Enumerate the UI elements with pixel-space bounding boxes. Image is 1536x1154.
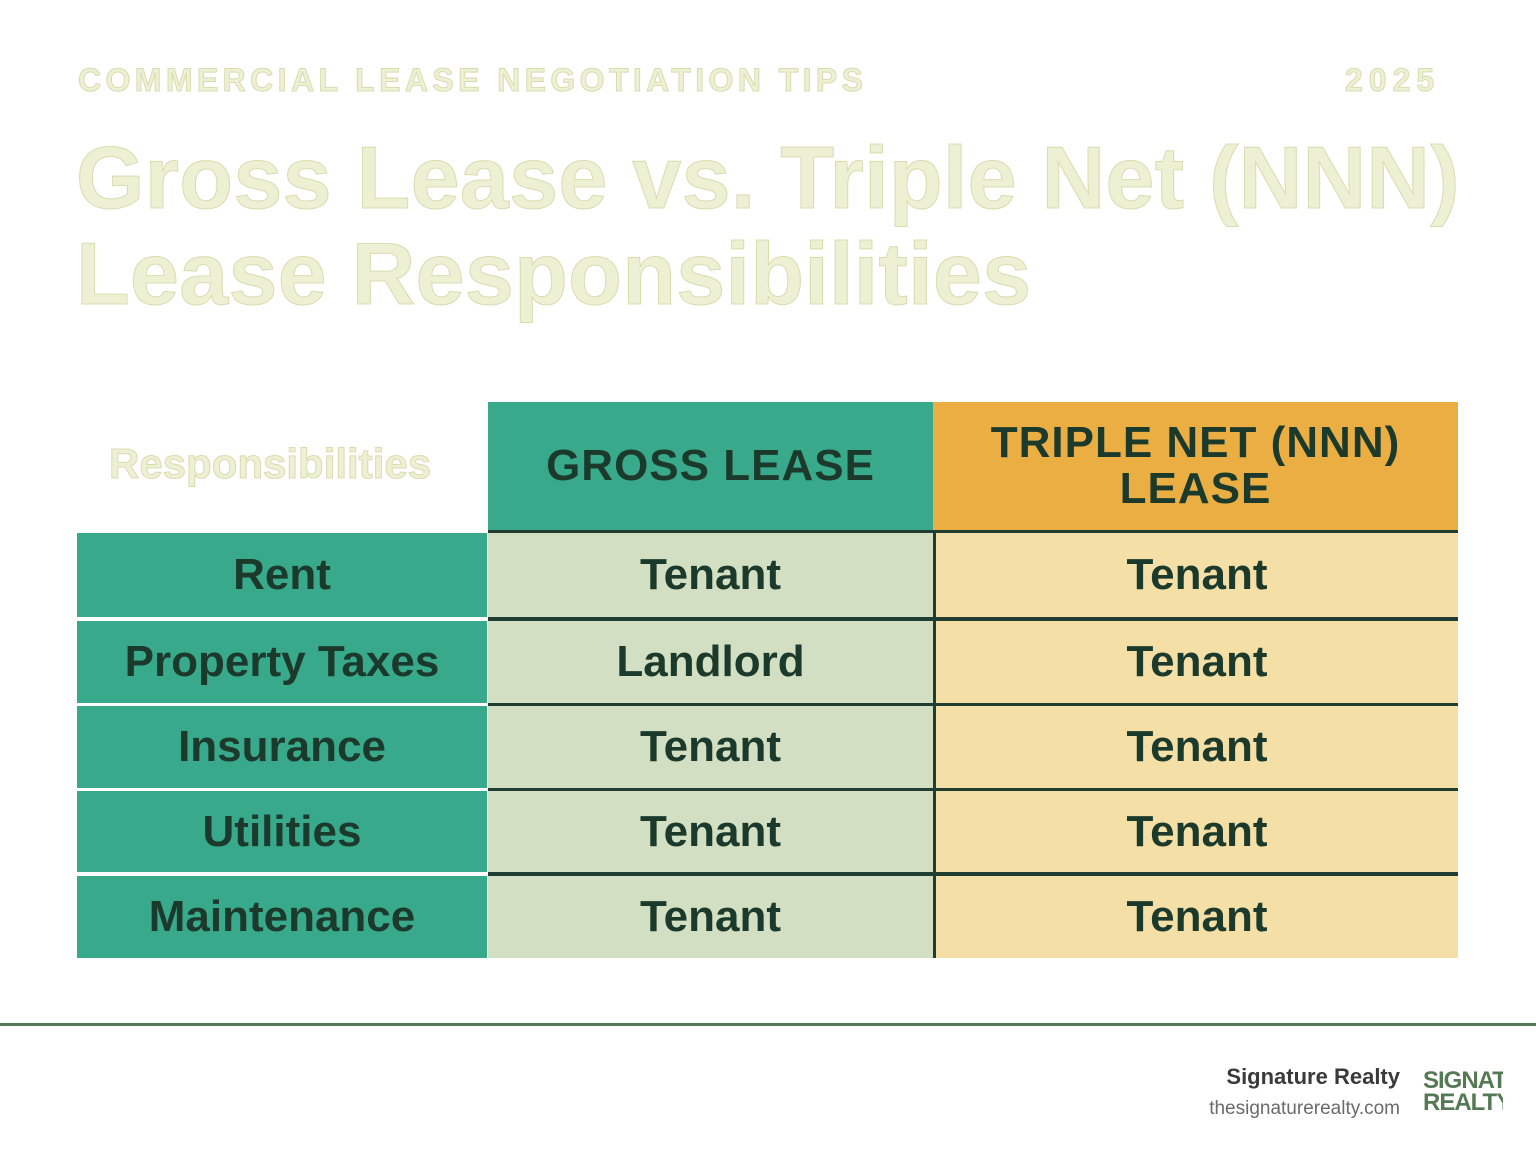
row: rent: Tenant: [1127, 550, 1267, 599]
header: gross lease: GROSS LEASE: [546, 441, 875, 490]
header: responsibilities: Responsibilities: [109, 440, 431, 487]
footer brand text: [1209, 1064, 1400, 1119]
row: rent: Rent: [233, 550, 331, 599]
row: utilities: Utilities: [203, 806, 361, 856]
row: utilities: Tenant: [1127, 806, 1267, 856]
year: 2025: [1345, 62, 1440, 98]
row: insurance: Insurance: [178, 722, 386, 771]
row: property taxes: Tenant: [1127, 637, 1267, 686]
footer brand text: Signature Realty: [1226, 1064, 1400, 1089]
header: NNN lease: TRIPLE NET (NNN): [991, 418, 1400, 467]
header: gross lease: [488, 402, 933, 530]
row: utilities: [77, 791, 1458, 872]
kicker: COMMERCIAL LEASE NEGOTIATION TIPS: [78, 62, 867, 98]
footer brand text: thesignaturerealty.com: [1209, 1098, 1400, 1119]
row: rent: Tenant: [640, 550, 781, 599]
row: insurance: Tenant: [1127, 722, 1267, 771]
row: maintenance: Maintenance: [149, 892, 415, 941]
header: NNN lease: LEASE: [1120, 464, 1271, 513]
logo: [1423, 1070, 1503, 1114]
row: property taxes: Landlord: [616, 637, 805, 686]
row: insurance: Tenant: [640, 722, 781, 771]
row: property taxes: [77, 621, 1458, 703]
row: rent: [77, 533, 1458, 617]
header: NNN lease: [933, 402, 1458, 530]
title: Gross Lease vs. Triple Net (NNN): [76, 128, 1460, 227]
row: maintenance: Tenant: [640, 892, 781, 941]
row: maintenance: [77, 876, 1458, 958]
row: property taxes: Property Taxes: [125, 637, 439, 686]
table: [77, 402, 1458, 958]
title: Lease Responsibilities: [76, 224, 1031, 323]
row: utilities: Tenant: [640, 806, 781, 856]
title: [76, 128, 1460, 323]
row: maintenance: Tenant: [1127, 892, 1267, 941]
row: insurance: [77, 706, 1458, 788]
